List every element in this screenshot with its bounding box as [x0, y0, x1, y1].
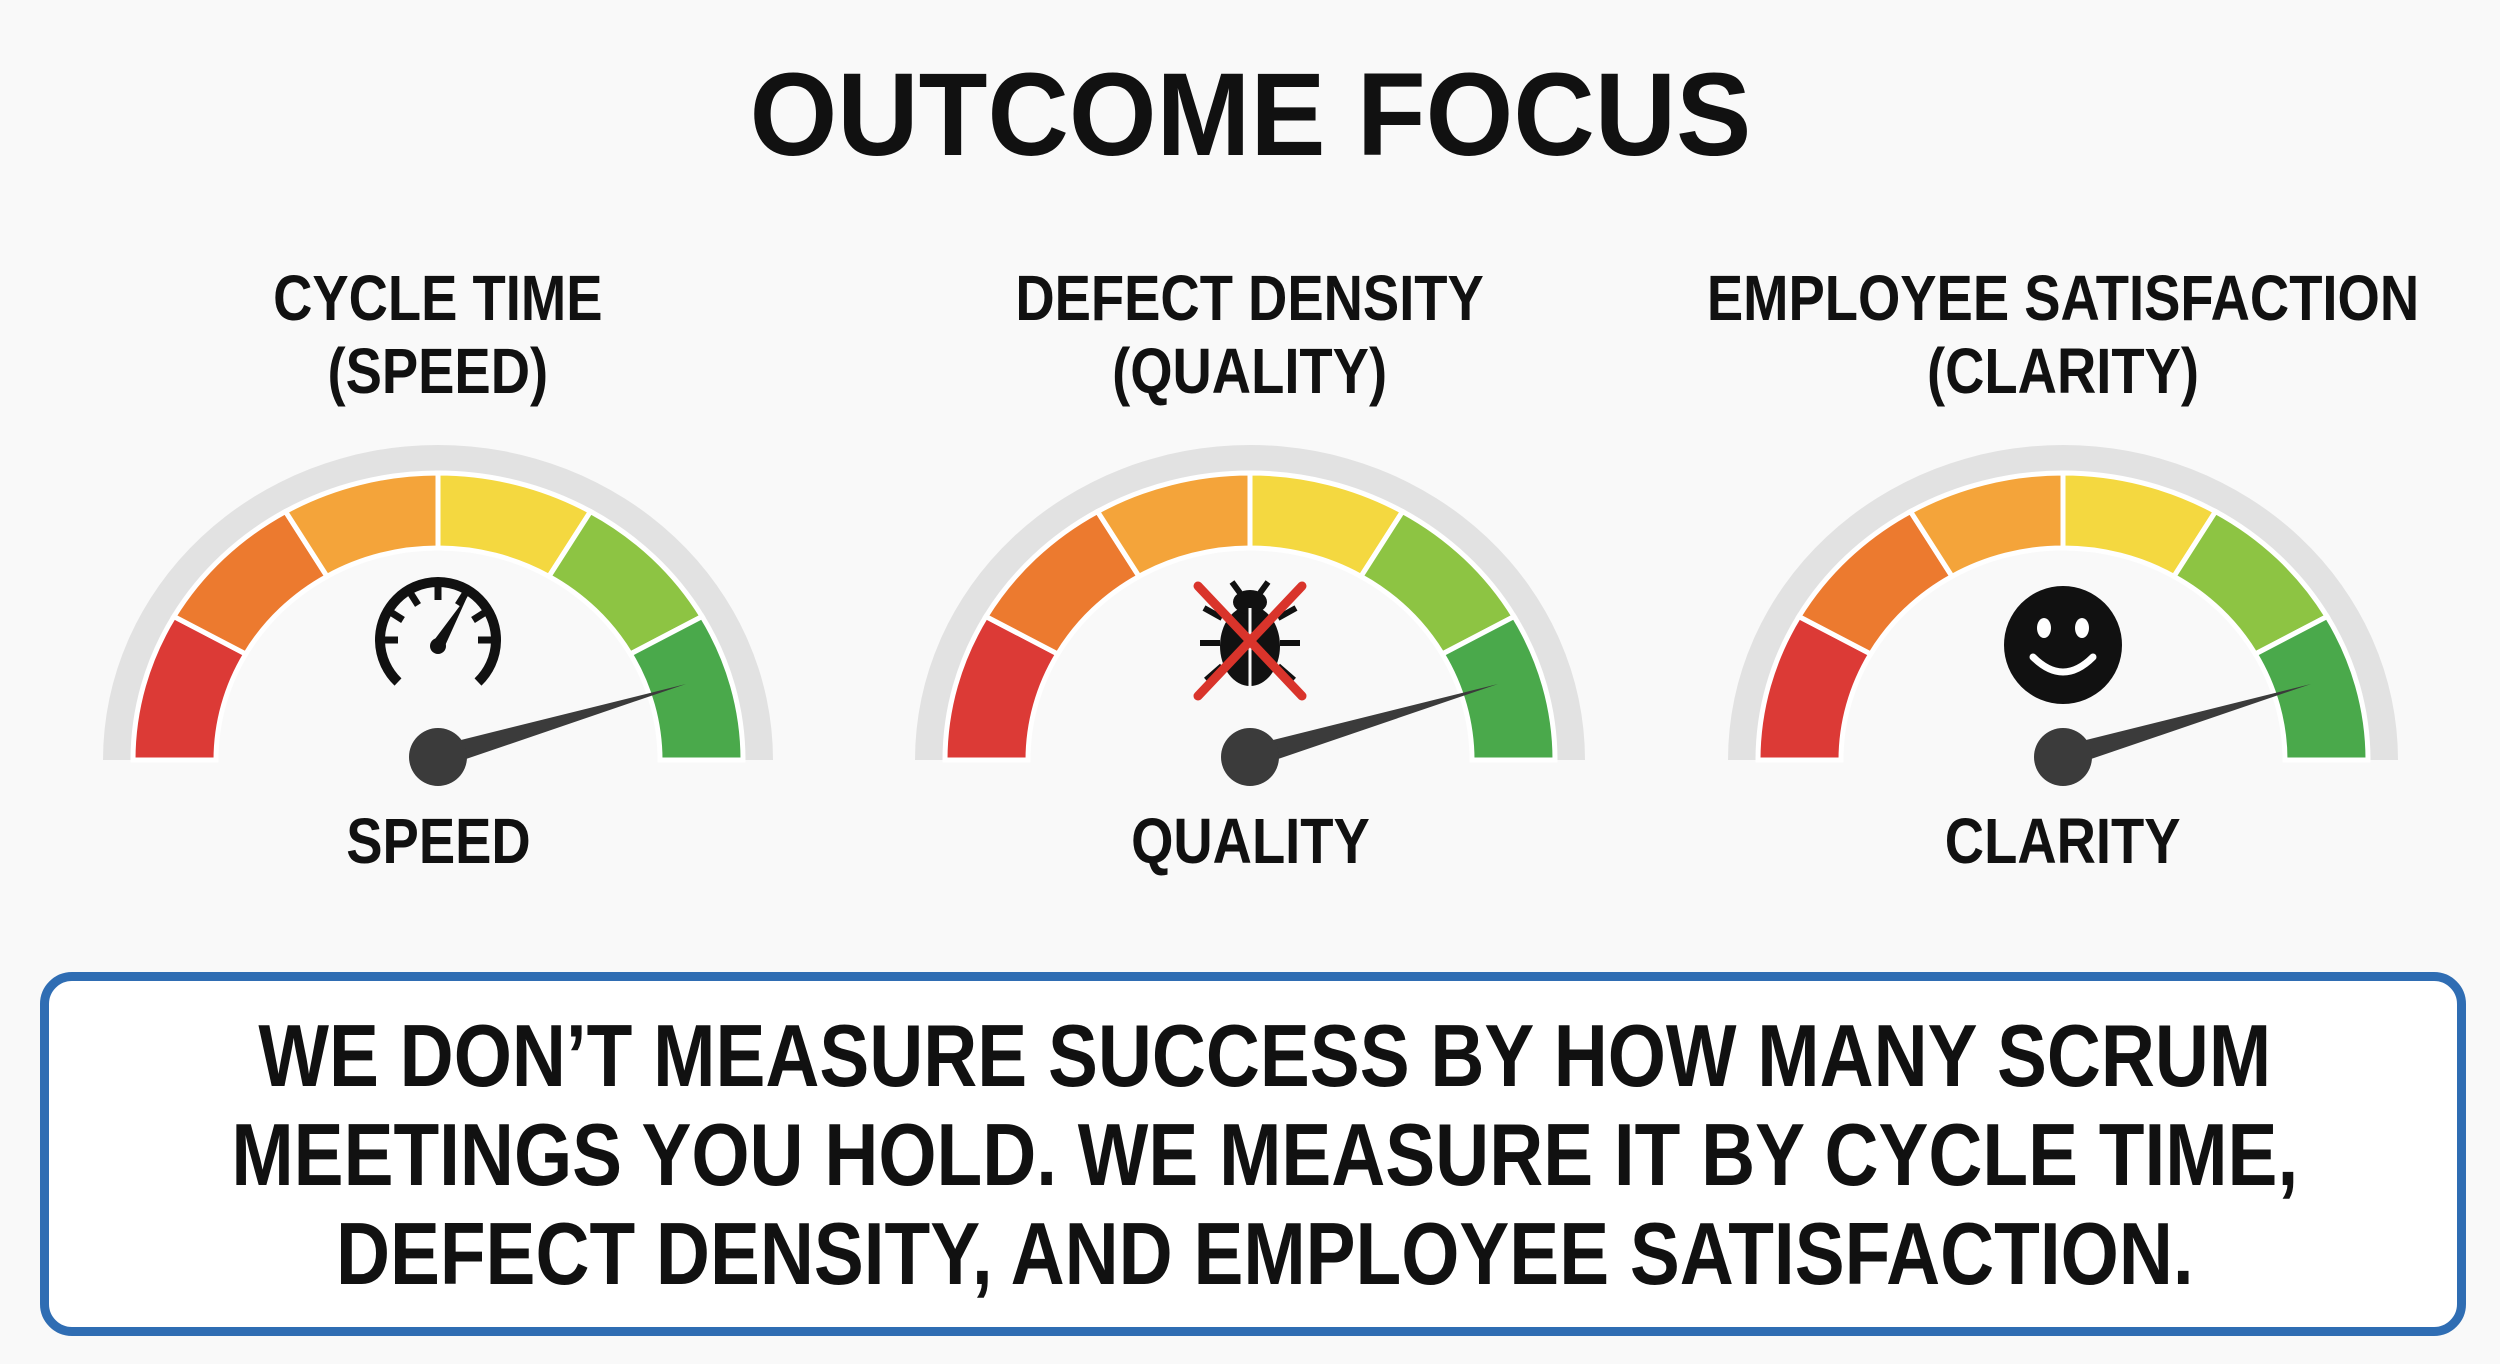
heading: defect density: [1016, 262, 1484, 407]
callout box: [40, 972, 2466, 1336]
heading: cycle time: CYCLE TIME: [273, 262, 603, 334]
label: clarity: CLARITY: [1945, 805, 2181, 877]
heading: cycle time: (SPEED): [328, 335, 548, 407]
heading: employee satisfaction: EMPLOYEE SATISFACTION: [1707, 262, 2419, 334]
icon: bug crossed out: [1198, 582, 1302, 696]
heading: cycle time: [273, 262, 603, 407]
icon: speedometer: [380, 582, 496, 682]
heading: defect density: (QUALITY): [1113, 335, 1387, 407]
title: OUTCOME FOCUS: [749, 49, 1751, 181]
icon: smiley: [2004, 586, 2122, 704]
gauge: speed: [103, 445, 773, 786]
gauge: clarity: [1728, 445, 2398, 786]
heading: employee satisfaction: [1707, 262, 2419, 407]
callout text: WE DON’T MEASURE SUCCESS BY HOW MANY SCRUM: [258, 1006, 2271, 1105]
label: quality: QUALITY: [1131, 805, 1369, 877]
heading: defect density: DEFECT DENSITY: [1016, 262, 1484, 334]
gauge: quality: [915, 445, 1585, 786]
label: speed: SPEED: [346, 805, 530, 877]
callout text: [231, 1006, 2298, 1303]
heading: employee satisfaction: (CLARITY): [1927, 335, 2199, 407]
callout text: MEETINGS YOU HOLD. WE MEASURE IT BY CYCLE TIME,: [231, 1105, 2298, 1204]
callout text: DEFECT DENSITY, AND EMPLOYEE SATISFACTION.: [336, 1204, 2194, 1303]
